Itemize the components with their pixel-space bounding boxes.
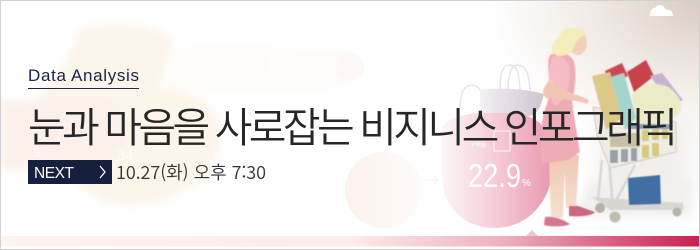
box: red xyxy=(605,63,628,84)
background: faded data labels xyxy=(33,56,307,164)
background: faded circles xyxy=(336,53,421,228)
cart: basket xyxy=(593,107,676,168)
box: beige xyxy=(592,72,622,130)
date and time: 10.27(화) 오후 7:30 xyxy=(116,159,266,185)
head xyxy=(569,31,587,55)
shoe: front xyxy=(569,206,595,216)
background: faded data labels: 9 xyxy=(33,144,41,160)
bottom bar xyxy=(0,230,700,246)
legs xyxy=(549,155,579,218)
next badge: NEXT xyxy=(34,165,75,182)
title: 눈과 마음을 사로잡는 비지니스 인포그래픽 xyxy=(28,94,678,154)
background: faded data labels: 34 xyxy=(117,147,134,164)
shopping cart xyxy=(592,60,683,222)
background: faded data labels: 21 xyxy=(290,63,307,80)
arm xyxy=(543,78,589,104)
box: blue xyxy=(628,175,661,205)
hair xyxy=(551,27,587,56)
background: faded blob left xyxy=(0,25,360,205)
cart: frame xyxy=(595,108,635,210)
figure: woman xyxy=(541,27,595,226)
shopping bag chart: 구매율 xyxy=(470,140,487,149)
shopping bag chart xyxy=(442,65,553,228)
shopping bag chart: 22.9 xyxy=(468,157,521,194)
box: red large xyxy=(627,60,654,92)
box: mint xyxy=(611,73,636,130)
floor shadow panel xyxy=(575,180,690,215)
shoes xyxy=(544,217,570,226)
cart: base xyxy=(592,197,683,210)
bag: lilac xyxy=(650,73,683,106)
dress xyxy=(541,53,580,164)
eyebrow: Data Analysis: Data Analysis xyxy=(28,66,139,85)
shopping bag chart: % xyxy=(522,178,531,189)
bag: cream xyxy=(632,84,681,124)
next badge xyxy=(28,160,112,184)
icon: faded arrow xyxy=(425,176,438,184)
icon: cloud xyxy=(650,5,673,16)
